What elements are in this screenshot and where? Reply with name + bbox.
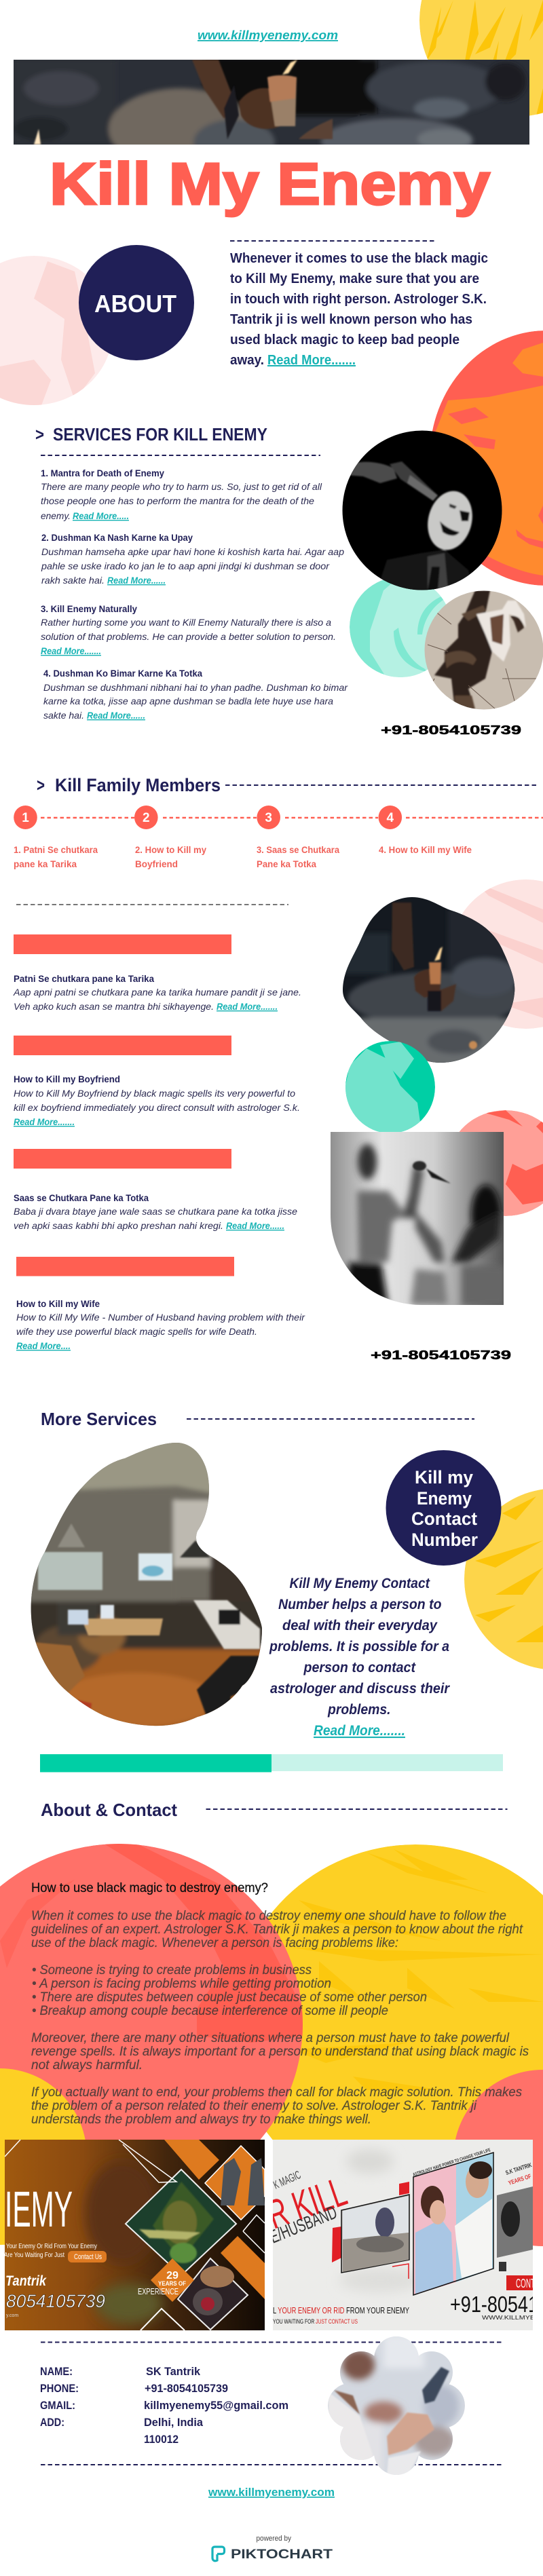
promo banner right: R KILL: [261, 2169, 352, 2237]
decorative blob: small coral right: [453, 2070, 543, 2246]
service 4: karne ka totka, jisse aap apne dushman se badla lete huye use hara: [43, 696, 333, 706]
contact details: killmyenemy55@gmail.com: [144, 2400, 288, 2412]
more services heading: More Services: [41, 1409, 157, 1429]
family member 2: [14, 1036, 300, 1127]
contact paragraph: Kill My Enemy Contact: [289, 1576, 430, 1591]
contact paragraph: Read More.......: [314, 1723, 405, 1739]
promo banner right: L YOUR ENEMY OR RID FROM YOUR ENEMY: [273, 2305, 409, 2315]
promo banner left: YEARS OF: [158, 2280, 186, 2287]
article text: use of the black magic. Whenever a person is facing problems like:: [31, 1936, 398, 1950]
decorative blob: big coral: [0, 1844, 303, 2140]
numbered timeline: 2: [143, 811, 150, 825]
family member 4: wife they use powerful black magic spells for wife Death.: [16, 1326, 257, 1337]
contact details: Delhi, India: [144, 2417, 204, 2429]
powered by piktochart: [212, 2535, 333, 2562]
family member 2: How to Kill my Boyfriend: [14, 1074, 120, 1084]
service 4: 4. Dushman Ko Bimar Karne Ka Totka: [43, 668, 202, 679]
photo: silhouette with knife: [331, 1132, 506, 1306]
timeline labels: [14, 844, 472, 869]
powered by piktochart: PIKTOCHART: [231, 2547, 333, 2562]
article text: • Someone is trying to create problems in business: [32, 1963, 312, 1977]
article text: not always harmful.: [31, 2058, 143, 2072]
photo: hand holding phone flower: [326, 2334, 468, 2477]
timeline labels: Boyfriend: [135, 858, 178, 869]
service 2: pahle se uske irado ko jan le to aap apni jindgi ki dushman se door: [41, 561, 330, 571]
service 1: enemy.: [41, 510, 71, 521]
contact paragraph: Number helps a person to: [278, 1597, 442, 1612]
article text: How to use black magic to destroy enemy?: [31, 1881, 268, 1895]
timeline labels: 1. Patni Se chutkara: [14, 844, 98, 855]
services heading: [35, 424, 320, 455]
promo banner left: EXPERIENCE: [138, 2286, 179, 2296]
service 2: rakh sakte hai.: [41, 575, 105, 586]
article text: If you actually want to end, your problems then call for black magic solution. This makes: [31, 2085, 522, 2100]
contact number circle: Contact: [411, 1509, 477, 1529]
promo banner left: 29: [166, 2270, 179, 2281]
kill family members heading: [37, 775, 537, 795]
family member 3: Saas se Chutkara Pane ka Totka: [14, 1192, 149, 1203]
promo banner left: 8054105739: [6, 2291, 105, 2311]
about paragraph: [230, 241, 488, 368]
about and contact heading: About & Contact: [41, 1800, 177, 1820]
family member 3: [14, 1149, 297, 1231]
family member 1: Veh apko kuch asan se mantra bhi sikhayenge.: [14, 1001, 214, 1012]
family member 1: Patni Se chutkara pane ka Tarika: [14, 973, 154, 984]
promo banner right: WWW.KILLMYE: [482, 2314, 535, 2321]
service 4: [43, 668, 348, 721]
promo banner left: y.com: [6, 2313, 18, 2318]
numbered timeline: 4: [387, 811, 394, 825]
family member 3: Baba ji dvara btaye jane wale saas se chutkara pane ka totka jisse: [14, 1206, 297, 1217]
contact paragraph: problems.: [327, 1702, 391, 1718]
contact details: SK Tantrik: [146, 2366, 201, 2378]
contact number circle: Kill my: [415, 1467, 473, 1488]
timeline labels: pane ka Tarika: [14, 858, 77, 869]
contact number circle: Enemy: [417, 1488, 472, 1509]
about paragraph: used black magic to keep bad people: [230, 333, 460, 347]
promo banner right: YOU WAITING FOR JUST CONTACT US: [273, 2318, 358, 2326]
phone number: +91-8054105739: [381, 723, 521, 737]
service 1: Read More.....: [73, 510, 129, 521]
timeline labels: 2. How to Kill my: [135, 844, 206, 855]
numbered timeline: 1: [22, 811, 29, 825]
contact number circle: [386, 1450, 501, 1566]
kill family members heading: Kill Family Members: [55, 775, 221, 795]
service 2: Dushman hamseha apke upar havi hone ki koshish karta hai. Agar aap: [41, 546, 344, 557]
numbered timeline: 3: [265, 811, 272, 825]
service 1: [41, 468, 322, 521]
service 2: 2. Dushman Ka Nash Karne ka Upay: [41, 532, 193, 543]
contact details: GMAIL:: [40, 2400, 75, 2412]
service 1: There are many people who try to harm us. So, just to get rid of all: [41, 481, 322, 492]
service 4: Dushman se dushhmani nibhani hai to yhan padhe. Dushman ko bimar: [43, 682, 348, 693]
promo banner right: [261, 2140, 538, 2330]
services heading: >: [35, 424, 44, 444]
about paragraph: away.: [230, 353, 264, 368]
about paragraph: Whenever it comes to use the black magic: [230, 251, 488, 266]
decorative blob: yellow top right: [419, 0, 543, 117]
family member 4: How to Kill My Wife - Number of Husband having problem with their: [16, 1312, 305, 1323]
contact details: 110012: [144, 2433, 179, 2446]
decorative blob: pink left: [0, 256, 113, 407]
contact paragraph: astrologer and discuss their: [270, 1681, 451, 1697]
contact number circle: Number: [411, 1530, 478, 1550]
contact details: NAME:: [40, 2366, 73, 2378]
family member 2: kill ex boyfriend immediately you direct consult with astrologer S.k.: [14, 1102, 300, 1113]
photo: ram skull: [421, 589, 543, 711]
contact details: ADD:: [40, 2417, 64, 2429]
service 1: those people one has to perform the mantra for the death of the: [41, 495, 314, 506]
decorative blob: coral right: [459, 1110, 543, 1216]
family member 1: Aap apni patni se chutkara pane ka tarika humare pandit ji se jane.: [13, 987, 301, 998]
promo banner left: IEMY: [5, 2181, 73, 2237]
promo banner right: YEARS OF: [508, 2172, 532, 2186]
decorative blob: small yellow left: [0, 2068, 87, 2245]
banner photo: hands holding candle: [14, 60, 529, 145]
divider: [16, 904, 288, 905]
family member 2: How to Kill My Boyfriend by black magic spells its very powerful to: [14, 1088, 295, 1099]
about paragraph: to Kill My Enemy, make sure that you are: [230, 271, 479, 286]
article text: • There are disputes between couple just because of some other person: [32, 1990, 427, 2005]
article text: understands the problem and always try to make things well.: [31, 2113, 371, 2127]
timeline labels: 3. Saas se Chutkara: [257, 844, 339, 855]
promo banner left: Tantrik: [5, 2273, 47, 2289]
decorative blob: yellow middle right: [464, 1488, 543, 1670]
promo banner right: S.K TANTRIK: [505, 2161, 533, 2176]
powered by piktochart: powered by: [257, 2535, 291, 2543]
contact dividers: [41, 2343, 502, 2465]
title: Kill My Enemy: [50, 151, 490, 217]
numbered timeline: [14, 806, 543, 829]
article text: revenge spells. It is always important for a person to understand that using black magic is: [31, 2045, 529, 2059]
promo banner right: K MAGIC: [272, 2168, 303, 2192]
about paragraph: Tantrik ji is well known person who has: [230, 312, 472, 327]
family member 1: Read More.......: [217, 1001, 278, 1012]
contact paragraph: person to contact: [303, 1660, 416, 1675]
service 3: [41, 603, 336, 656]
contact details: +91-8054105739: [145, 2383, 228, 2395]
service 4: sakte hai.: [43, 710, 84, 721]
decorative blob: big yellow: [266, 1844, 543, 2140]
photo: classroom blob: [27, 1439, 265, 1730]
promo banner left: Your Enemy Or Rid From Your Enemy: [6, 2243, 97, 2250]
website link bottom: www.killmyenemy.com: [208, 2486, 335, 2499]
contact details: PHONE:: [40, 2383, 79, 2395]
service 1: 1. Mantra for Death of Enemy: [41, 468, 164, 478]
promo banner left: Are You Waiting For Just: [4, 2252, 64, 2259]
promo banner left: [4, 2140, 265, 2330]
timeline labels: 4. How to Kill my Wife: [379, 844, 472, 855]
service 3: Rather hurting some you want to Kill Enemy Naturally there is also a: [41, 617, 331, 628]
about circle: ABOUT: [94, 290, 176, 318]
decorative blob: pink right: [462, 879, 543, 1029]
article text: guidelines of an expert. Astrologer S.K. Tantrik ji makes a person to know about the right: [31, 1922, 523, 1937]
family member 3: veh apki saas kabhi bhi apko preshan nahi kregi.: [14, 1220, 223, 1231]
article text: Moreover, there are many other situations where a person must have to take powerful: [31, 2031, 510, 2045]
photo: candle seated figure: [339, 894, 521, 1067]
services heading: SERVICES FOR KILL ENEMY: [53, 424, 267, 444]
website link top: www.killmyenemy.com: [198, 29, 338, 42]
service 2: Read More......: [107, 575, 166, 586]
article text: • A person is facing problems while getting promotion: [32, 1977, 331, 1991]
decorative blob: teal: [350, 580, 446, 677]
contact details: [40, 2366, 288, 2446]
family member 4: How to Kill my Wife: [16, 1298, 100, 1309]
about circle: [79, 245, 194, 360]
promo banner right: E/HUSBAND: [267, 2202, 340, 2248]
service 4: Read More......: [87, 710, 145, 721]
timeline labels: Pane ka Totka: [257, 858, 316, 869]
contact paragraph: deal with their everyday: [282, 1618, 438, 1633]
contact paragraph: [269, 1576, 451, 1739]
family member 4: [16, 1257, 305, 1351]
article text: • Breakup among couple because interference of some ill people: [32, 2004, 388, 2018]
family member 1: [13, 934, 301, 1012]
promo banner left: Contact Us: [74, 2253, 102, 2261]
decorative blob: orange right: [430, 330, 543, 586]
kill family members heading: >: [37, 775, 45, 795]
article text: When it comes to use the black magic to destroy enemy one should have to follow the: [31, 1909, 506, 1923]
service 2: [41, 532, 344, 586]
family member 2: Read More.......: [14, 1116, 75, 1127]
service 3: 3. Kill Enemy Naturally: [41, 603, 137, 614]
progress bar: [40, 1754, 503, 1773]
about paragraph: in touch with right person. Astrologer S.K.: [230, 292, 487, 307]
article text: [31, 1881, 529, 2127]
service 3: Read More.......: [41, 645, 101, 656]
about paragraph: Read More.......: [267, 353, 356, 368]
service 3: solution of that problems. He can provide a better solution to person.: [41, 631, 336, 642]
family member 4: Read More....: [16, 1340, 71, 1351]
decorative blob: green: [343, 1041, 435, 1135]
photo: masked man with gun: [339, 428, 506, 594]
contact paragraph: problems. It is possible for a: [269, 1639, 449, 1654]
article text: the problem of a person related to their enemy to solve. Astrologer S.K. Tantrik ji: [31, 2099, 477, 2113]
family member 3: Read More......: [226, 1220, 284, 1231]
promo banner right: ASTROLOGY HAVE POWER TO CHANGE YOUR LIFE: [412, 2148, 491, 2178]
phone number: +91-8054105739: [371, 1348, 511, 1362]
